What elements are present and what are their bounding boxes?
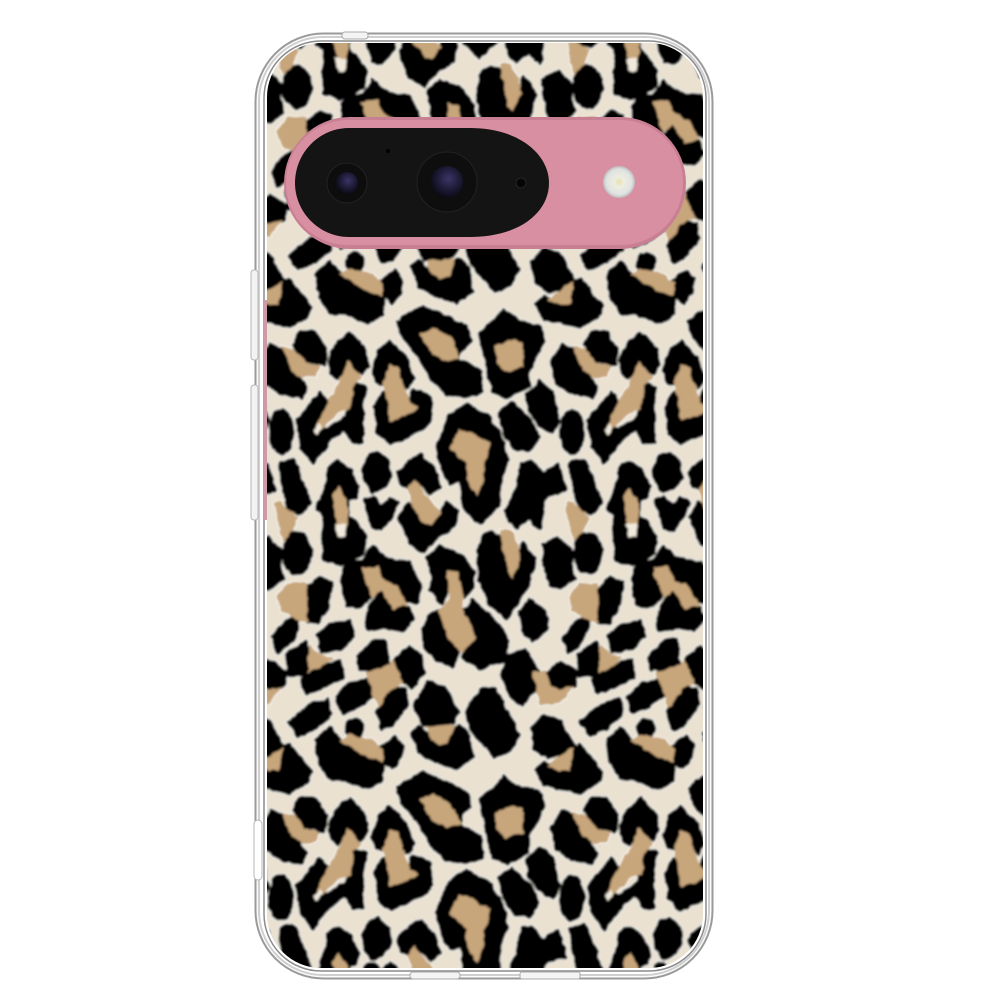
case notches top and bottom xyxy=(342,32,580,979)
flash xyxy=(603,166,635,198)
sensor dot xyxy=(516,178,526,188)
main rear lens xyxy=(417,152,477,212)
leopard print back panel xyxy=(267,43,703,968)
small rear lens xyxy=(327,163,367,203)
pink phone frame strip on left side xyxy=(264,300,267,520)
black camera pill xyxy=(295,128,549,237)
microphone dot xyxy=(386,149,390,153)
phone case product illustration xyxy=(250,32,714,980)
camera bar xyxy=(284,117,686,249)
clear case shell xyxy=(256,34,712,978)
side buttons on left edge xyxy=(251,270,262,880)
